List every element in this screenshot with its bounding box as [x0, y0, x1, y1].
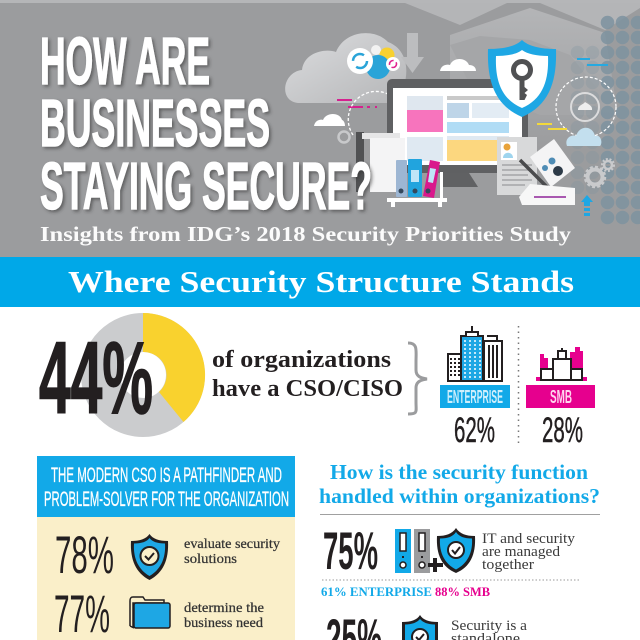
heading: security function: How is the security function	[330, 460, 588, 484]
stat: 62%: 62%	[454, 411, 495, 450]
illustration: binders on shelf	[387, 159, 447, 207]
label: smb: SMB	[550, 387, 572, 407]
heading: security function: handled within organizations?	[319, 484, 600, 508]
breakdown: enterprise and SMB	[321, 584, 490, 599]
text: determine the business need	[184, 601, 264, 631]
heading: security function	[319, 460, 600, 508]
breakdown: enterprise and SMB: 88% SMB	[435, 584, 490, 599]
icon: smb buildings	[536, 347, 587, 381]
icon: upload arrow	[581, 195, 593, 216]
section banner: Where Security Structure Stands	[68, 264, 574, 299]
stat label: have a CSO/CISO	[212, 376, 403, 402]
panel: modern CSO	[37, 456, 295, 640]
section banner	[0, 257, 640, 307]
panel heading	[37, 456, 295, 517]
title: BUSINESSES	[40, 86, 270, 161]
icon: shield check	[402, 615, 438, 640]
stat: 78%: 78%	[55, 526, 114, 585]
panel heading: PROBLEM-SOLVER FOR THE ORGANIZATION	[44, 488, 289, 511]
decorative pink dashes	[337, 100, 377, 107]
icon: gears	[585, 159, 614, 187]
brace	[408, 343, 427, 414]
text: IT and security: together	[482, 557, 534, 573]
title	[40, 24, 372, 224]
text: evaluate security solutions: evaluate security	[184, 537, 280, 552]
panel heading: THE MODERN CSO IS A PATHFINDER AND	[51, 464, 282, 487]
icon: white clouds	[314, 59, 476, 126]
stat label: of organizations	[212, 347, 391, 373]
icon: shield check	[131, 534, 168, 580]
stat: 75%: 75%	[323, 522, 378, 581]
text: determine the business need: business need	[184, 616, 263, 631]
illustration: digital cloud circle	[556, 77, 616, 137]
text: determine the business need: determine the	[184, 601, 264, 616]
decorative dashes	[577, 59, 608, 65]
label: enterprise	[440, 385, 510, 408]
icon: folder	[130, 597, 170, 628]
text: IT and security	[482, 531, 576, 573]
big stat: 44%: 44%	[39, 321, 153, 435]
header panel	[0, 0, 640, 257]
text: IT and security: are managed	[482, 544, 561, 560]
label: enterprise: ENTERPRISE	[447, 387, 503, 407]
icon: download arrow	[401, 33, 424, 73]
illustration: document folder	[356, 132, 405, 192]
stat label	[212, 347, 403, 402]
illustration: cloud	[285, 33, 406, 103]
label: smb	[526, 385, 595, 408]
dotted divider	[518, 326, 520, 443]
title: HOW ARE	[40, 24, 210, 99]
text: IT and security: IT and security	[482, 531, 576, 547]
icon: pale blue cloud	[566, 128, 601, 146]
illustration: monitor	[387, 79, 528, 187]
icon: binders plus shield	[395, 528, 475, 573]
icon: cloud sync cluster	[347, 45, 400, 79]
text: security is standalone: Security is a	[451, 618, 527, 634]
stat: 28%: 28%	[542, 411, 583, 450]
icon: enterprise buildings	[448, 326, 502, 381]
icon: shield with key	[488, 40, 556, 117]
illustration: resume and papers	[497, 137, 575, 205]
subtitle: Insights from IDG’s 2018 Security Priorities Study	[40, 222, 571, 246]
donut chart: 44%	[100, 313, 205, 422]
text: evaluate security solutions	[184, 537, 280, 567]
breakdown: enterprise and SMB: 61% ENTERPRISE	[321, 584, 432, 599]
text: evaluate security solutions: solutions	[184, 552, 237, 567]
